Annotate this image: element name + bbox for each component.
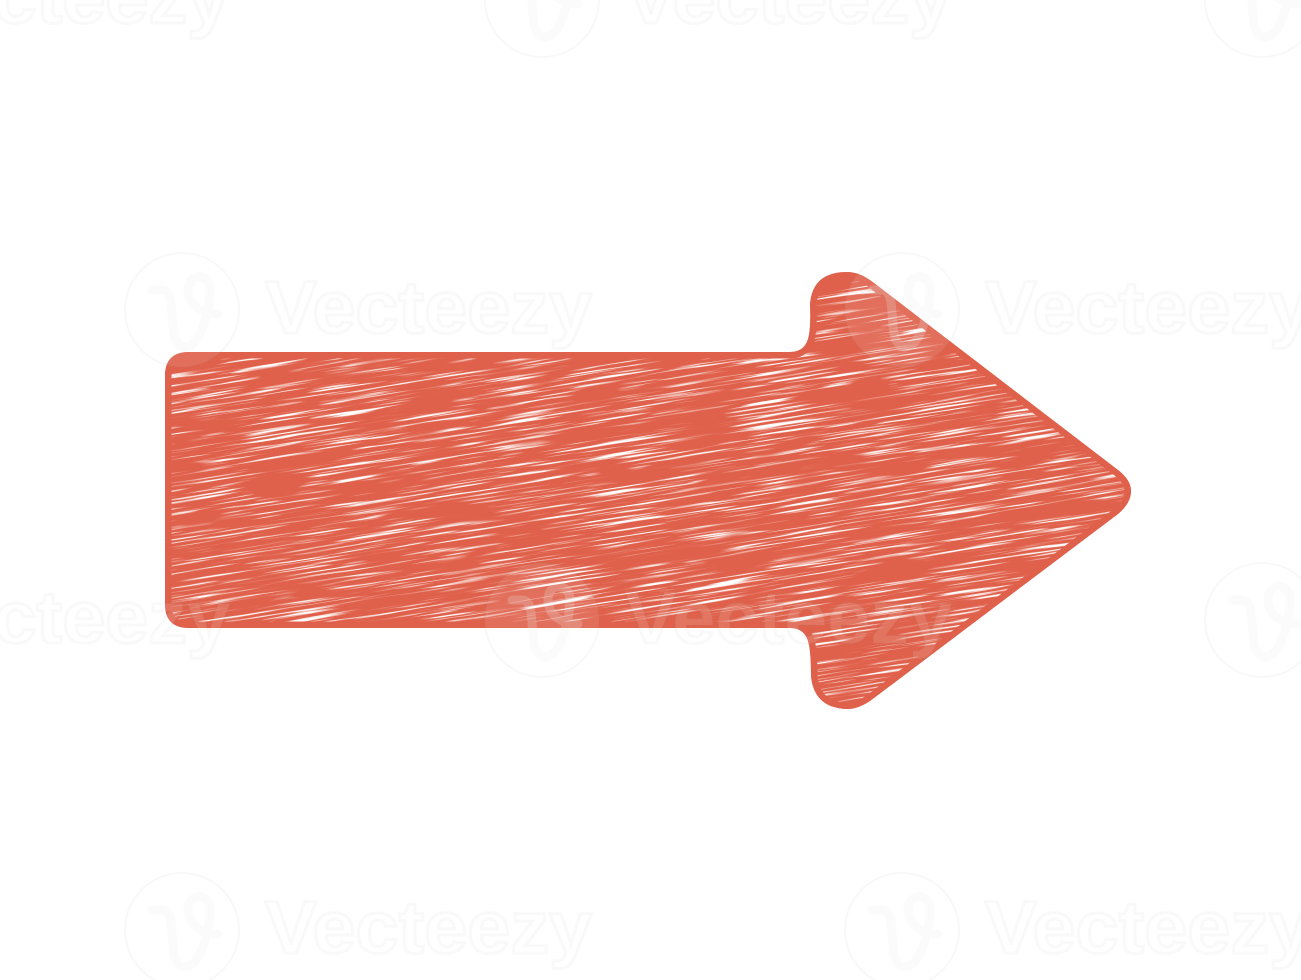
watermark row 2: Vecteezy	[985, 266, 1301, 349]
arrow scribble hatching	[165, 272, 1131, 709]
watermark row 4	[125, 873, 1301, 980]
scene: arrow with watermarks	[165, 272, 1131, 709]
arrow	[165, 272, 1131, 709]
watermark row 2: Vecteezy	[265, 266, 592, 349]
watermark row 1	[0, 0, 1301, 57]
watermark row 4: Vecteezy	[265, 886, 592, 969]
watermark row 2	[125, 253, 1301, 367]
arrow body	[165, 272, 1131, 709]
watermark row 3: Vecteezy	[625, 576, 952, 659]
watermark row 4: Vecteezy	[985, 886, 1301, 969]
watermark row 3	[0, 563, 1301, 677]
